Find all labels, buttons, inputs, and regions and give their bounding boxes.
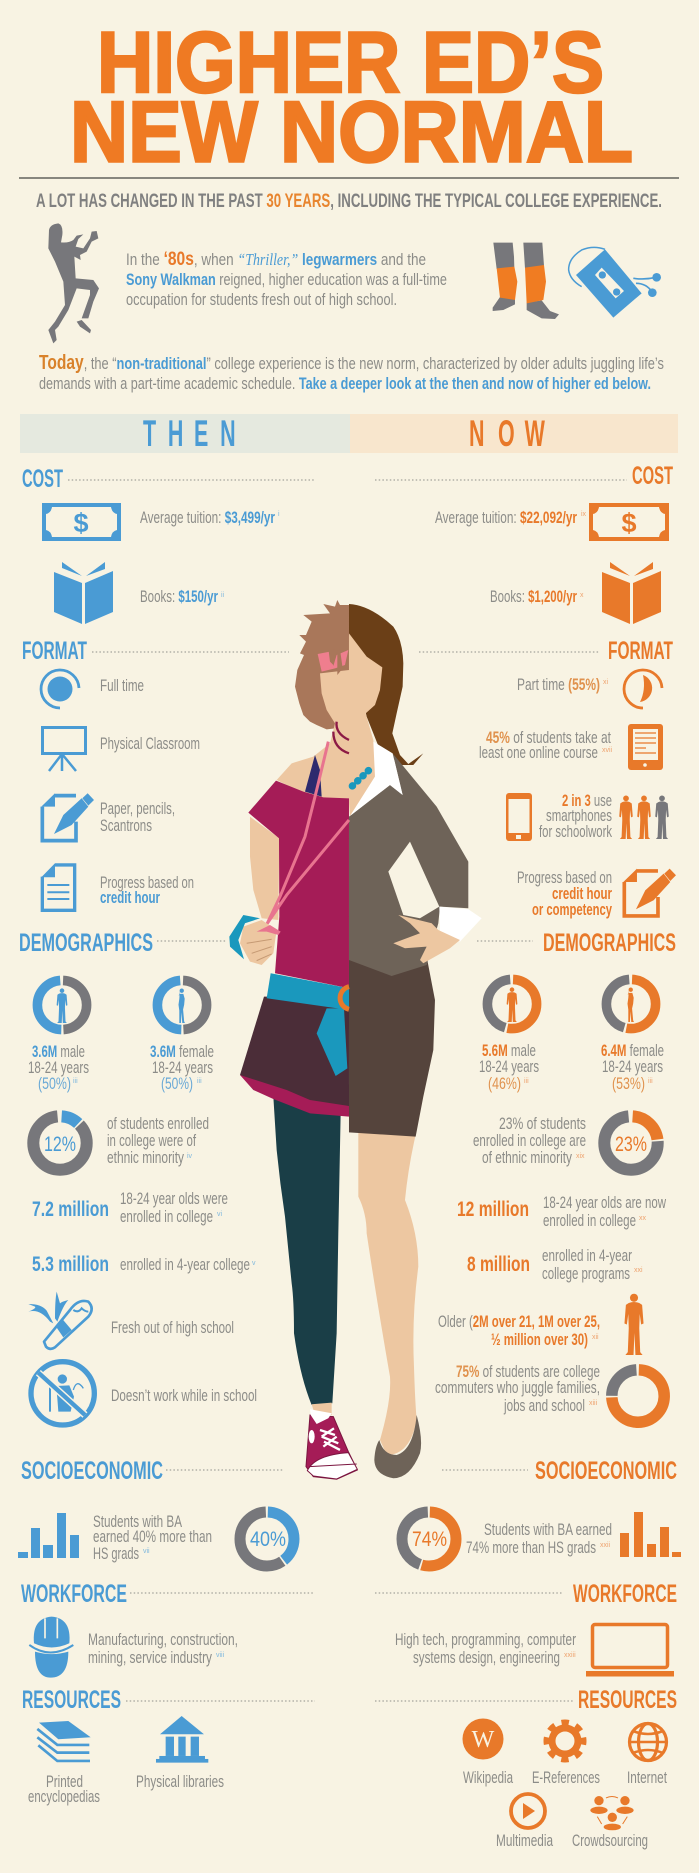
text: multimedia: Multimedia: [496, 1832, 554, 1850]
icon: older person: [624, 1294, 644, 1355]
text: older: [438, 1313, 600, 1349]
text: 4-year now: college programs: [542, 1265, 630, 1283]
text: doesn't work: Doesn’t work while in school: [111, 1387, 257, 1405]
chart: male donut then: [37, 980, 87, 1030]
text: female stats then: [150, 1043, 214, 1093]
icon: three people: [619, 796, 669, 839]
figure: blazer: [349, 753, 468, 976]
text: commuters: jobs and school: [503, 1397, 585, 1415]
icon: gear: [546, 1722, 584, 1760]
icon: crowdsourcing: [590, 1796, 634, 1830]
text: credit hour then: Progress based on: [100, 874, 194, 892]
heading: format then: FORMAT: [22, 637, 87, 665]
icon: open book then: [54, 562, 113, 624]
text: earnings now: Students with BA earned: [484, 1521, 612, 1539]
text: 4-year then: v: [252, 1260, 256, 1267]
stat: 5.3 million: 5.3 million: [32, 1253, 109, 1276]
chart: 40 percent donut: 40%: [250, 1528, 286, 1551]
text: male stats now: (46%): [488, 1075, 521, 1093]
icon: tablet: [628, 724, 663, 770]
text: 18-24 enrolled then: vi: [217, 1211, 222, 1218]
text: tuition now: Average tuition: $22,092/yr: [435, 509, 577, 527]
figure: upper body: [229, 600, 482, 1010]
text: e-references: E-References: [532, 1769, 600, 1787]
figure: bead necklace: [352, 767, 373, 786]
text: 18-24 enrolled now: [543, 1194, 666, 1230]
chart: 75 percent donut: [612, 1370, 664, 1422]
text: smartphones: 2 in 3 use: [562, 792, 612, 810]
text: male stats now: 5.6M male: [482, 1042, 536, 1060]
text: high tech: xxiii: [564, 1652, 576, 1659]
text: earnings then: [93, 1513, 212, 1563]
figure: skin, neck and shoulders: [250, 633, 382, 920]
text: 4-year now: xxi: [634, 1267, 643, 1274]
text: manufacturing: Manufacturing, construction,: [88, 1631, 238, 1649]
text: paper pencils: [100, 800, 175, 835]
text: high tech: High tech, programming, computer: [395, 1631, 576, 1649]
chart: 40 percent donut: [240, 1512, 294, 1566]
text: credit hour now: credit hour: [552, 885, 612, 903]
text: part time: Part time (55%): [517, 676, 600, 694]
chart: female donut then: [157, 980, 207, 1030]
text: earnings then: earned 40% more than: [93, 1528, 212, 1546]
figure: retro hair: [295, 600, 349, 729]
text: paper pencils: Scantrons: [100, 817, 152, 835]
text: male stats now: [479, 1042, 539, 1093]
stat: 8 million: 8 million: [467, 1253, 530, 1276]
intro text: today: [39, 352, 664, 393]
text: paper pencils: Paper, pencils,: [100, 800, 175, 818]
intro text: the 80s: [126, 249, 447, 309]
figure: white cuff: [439, 907, 482, 942]
icon: dollar bill then: $: [73, 508, 89, 538]
heading: workforce then: WORKFORCE: [21, 1580, 127, 1608]
text: male stats then: (50%): [38, 1075, 71, 1093]
text: older: Older (2M over 21, 1M over 25,: [438, 1313, 600, 1331]
figure: left hand and wristband: [229, 915, 281, 965]
icon: smartphone: [506, 793, 532, 841]
stat: 7.2 million: 7.2 million: [32, 1198, 109, 1221]
icon: walkman cassette: [569, 247, 661, 318]
text: online course: [479, 729, 613, 762]
text: male stats then: iii: [73, 1078, 78, 1085]
text: credit hour then: credit hour: [100, 889, 160, 907]
text: earnings then: Students with BA: [93, 1513, 182, 1531]
text: ethnic minority then: ethnic minority: [107, 1149, 185, 1167]
icon: open book now: [602, 562, 661, 624]
title: NEW NORMAL: [70, 84, 633, 180]
icon: diploma and leaves: [28, 1292, 92, 1349]
text: smartphones: smartphones: [546, 807, 612, 825]
text: ethnic minority now: xix: [576, 1153, 585, 1160]
text: books then: Books: $150/yr: [140, 588, 218, 606]
icon: part time clock: [624, 670, 662, 708]
text: commuters: 75% of students are college: [456, 1363, 600, 1381]
intro text: the 80s: Sony Walkman reigned, higher education was a full-time: [126, 271, 447, 289]
text: crowdsourcing: Crowdsourcing: [572, 1832, 648, 1850]
text: ethnic minority now: [473, 1115, 586, 1167]
text: older: ½ million over 30): [491, 1331, 588, 1349]
chart: male donut now: [487, 979, 537, 1029]
icon: play button: [511, 1794, 545, 1828]
text: ethnic minority then: [107, 1115, 209, 1167]
text: female stats then: (50%): [161, 1075, 193, 1093]
intro text: the 80s: In the ‘80s, when “Thriller,” legwarmers and the: [126, 249, 426, 270]
text: printed encyclopedias: encyclopedias: [28, 1788, 100, 1806]
text: earnings now: 74% more than HS grads: [466, 1539, 596, 1557]
text: physical classroom: Physical Classroom: [100, 735, 200, 753]
text: wikipedia: Wikipedia: [463, 1769, 514, 1787]
text: female stats then: 18-24 years: [152, 1059, 213, 1077]
figure: walkman cord: [262, 742, 349, 932]
text: manufacturing: viii: [216, 1652, 225, 1659]
text: ethnic minority then: in college were of: [107, 1132, 196, 1150]
icon: dollar bill now: $: [621, 508, 637, 538]
text: physical libraries: Physical libraries: [136, 1773, 224, 1791]
text: tuition then: Average tuition: $3,499/yr: [140, 509, 275, 527]
icon: projector screen: [42, 728, 86, 771]
text: ethnic minority now: enrolled in college are: [473, 1132, 586, 1150]
figure: legs, shoes and skirts: [240, 957, 435, 1479]
text: 18-24 enrolled then: [120, 1190, 228, 1226]
text: 18-24 enrolled then: enrolled in college: [120, 1208, 213, 1226]
text: online course: xvii: [602, 747, 613, 754]
figure: modern hair: [349, 604, 423, 765]
text: female stats now: [601, 1042, 664, 1093]
heading: now: NOW: [469, 414, 545, 455]
icon: no work sign: [31, 1362, 94, 1425]
text: ethnic minority now: of ethnic minority: [482, 1149, 573, 1167]
text: manufacturing: [88, 1631, 238, 1667]
text: female stats then: 3.6M female: [150, 1043, 214, 1061]
icon: hard hat worker: [29, 1617, 73, 1678]
heading: then: THEN: [143, 414, 236, 455]
text: online course: 45% of students take at: [486, 729, 611, 747]
title: [70, 15, 633, 180]
figure: magenta top: [248, 781, 349, 988]
text: earnings now: xxii: [600, 1542, 611, 1549]
text: earnings then: vii: [143, 1548, 150, 1555]
heading: resources then: RESOURCES: [22, 1686, 121, 1714]
text: manufacturing: mining, service industry: [88, 1649, 213, 1667]
figure: white collar: [350, 742, 403, 816]
text: 4-year then: enrolled in 4-year college: [120, 1256, 250, 1274]
text: commuters: [435, 1363, 600, 1415]
text: female stats now: (53%): [612, 1075, 645, 1093]
text: commuters: xiii: [589, 1400, 598, 1407]
icon: legwarmers: [493, 243, 559, 319]
text: male stats then: 18-24 years: [28, 1059, 89, 1077]
icon: paper and pencil now: [623, 869, 676, 916]
icon: library building: [156, 1716, 208, 1763]
heading: demographics then: DEMOGRAPHICS: [19, 929, 153, 957]
figure: belt: [267, 973, 349, 1010]
text: tuition now: ix: [581, 511, 587, 518]
text: 4-year now: enrolled in 4-year: [542, 1247, 632, 1265]
text: credit hour now: or competency: [532, 901, 613, 919]
icon: paper and pencil then: [41, 793, 94, 841]
illustration: half-and-half woman: [229, 600, 482, 1479]
text: credit hour then: [100, 874, 194, 907]
text: ethnic minority now: 23% of students: [499, 1115, 586, 1133]
panel: then band: [20, 414, 350, 455]
icon: full time clock: [41, 670, 79, 708]
text: commuters: commuters who juggle families,: [435, 1379, 600, 1397]
text: male stats then: [28, 1043, 89, 1093]
text: 18-24 enrolled then: 18-24 year olds were: [120, 1190, 228, 1208]
chart: bars then: [18, 1513, 79, 1558]
icon: wikipedia: W: [472, 1727, 495, 1753]
stat: 12 million: 12 million: [457, 1198, 529, 1221]
text: high tech: systems design, engineering: [413, 1649, 560, 1667]
chart: 23 percent donut: 23%: [615, 1133, 647, 1156]
text: male stats now: 18-24 years: [479, 1058, 539, 1076]
figure: hand on hip: [393, 915, 460, 963]
text: smartphones: [539, 792, 613, 841]
icon: wikipedia: [462, 1718, 504, 1760]
icon: dollar bill then: [42, 503, 121, 541]
text: ethnic minority then: iv: [187, 1153, 193, 1160]
text: books now: x: [580, 592, 584, 599]
chart: female donut now: [606, 979, 656, 1029]
text: female stats now: 18-24 years: [602, 1058, 663, 1076]
text: internet: Internet: [627, 1769, 667, 1787]
text: male stats then: 3.6M male: [32, 1043, 85, 1061]
chart: 74 percent donut: 74%: [412, 1528, 447, 1551]
text: credit hour now: Progress based on: [517, 869, 612, 887]
text: tuition then: i: [278, 511, 280, 518]
title: HIGHER ED’S: [97, 15, 604, 111]
text: full time: Full time: [100, 677, 144, 695]
chart: 23 percent donut: [604, 1116, 658, 1170]
chart: 12 percent donut: 12%: [44, 1133, 76, 1156]
text: smartphones: for schoolwork: [539, 823, 613, 841]
text: ethnic minority then: of students enrolled: [107, 1115, 209, 1133]
panel: now band: [350, 414, 678, 455]
text: high tech: [395, 1631, 576, 1667]
text: female stats then: iii: [197, 1078, 202, 1085]
text: 18-24 enrolled now: xx: [639, 1215, 646, 1222]
text: male stats now: iii: [524, 1078, 529, 1085]
figure: navy strap: [305, 755, 322, 797]
icon: document then: [41, 863, 75, 910]
text: part time: xi: [603, 679, 608, 686]
icon: encyclopedias: [37, 1721, 91, 1761]
heading: cost then: COST: [22, 465, 63, 493]
text: female stats now: 6.4M female: [601, 1042, 664, 1060]
heading: socioeconomic then: SOCIOECONOMIC: [21, 1457, 163, 1485]
text: 18-24 enrolled now: enrolled in college: [543, 1212, 636, 1230]
figure: belt ring: [340, 987, 349, 1009]
icon: globe: [630, 1724, 666, 1760]
icon: dollar bill now: [589, 503, 669, 541]
text: earnings now: [466, 1521, 612, 1557]
text: 4-year now: [542, 1247, 643, 1283]
text: books now: Books: $1,200/yr: [490, 588, 577, 606]
text: fresh out of high school: Fresh out of high school: [111, 1319, 234, 1337]
figure: neck choker: [333, 722, 349, 753]
chart: 74 percent donut: [402, 1512, 456, 1566]
text: credit hour now: [517, 869, 613, 919]
text: earnings then: HS grads: [93, 1545, 139, 1563]
icon: thriller dancer: [48, 223, 99, 343]
text: older: xii: [592, 1334, 599, 1341]
text: female stats now: iii: [648, 1078, 653, 1085]
figure: headband: [318, 650, 348, 672]
chart: 12 percent donut: [33, 1116, 87, 1170]
intro text: the 80s: occupation for students fresh out of high school.: [126, 291, 397, 309]
chart: bars now: [620, 1512, 681, 1557]
text: printed encyclopedias: [28, 1773, 100, 1806]
text: printed encyclopedias: Printed: [46, 1773, 83, 1791]
text: online course: least one online course: [479, 744, 598, 762]
icon: laptop: [586, 1624, 674, 1676]
text: books then: ii: [221, 592, 225, 599]
